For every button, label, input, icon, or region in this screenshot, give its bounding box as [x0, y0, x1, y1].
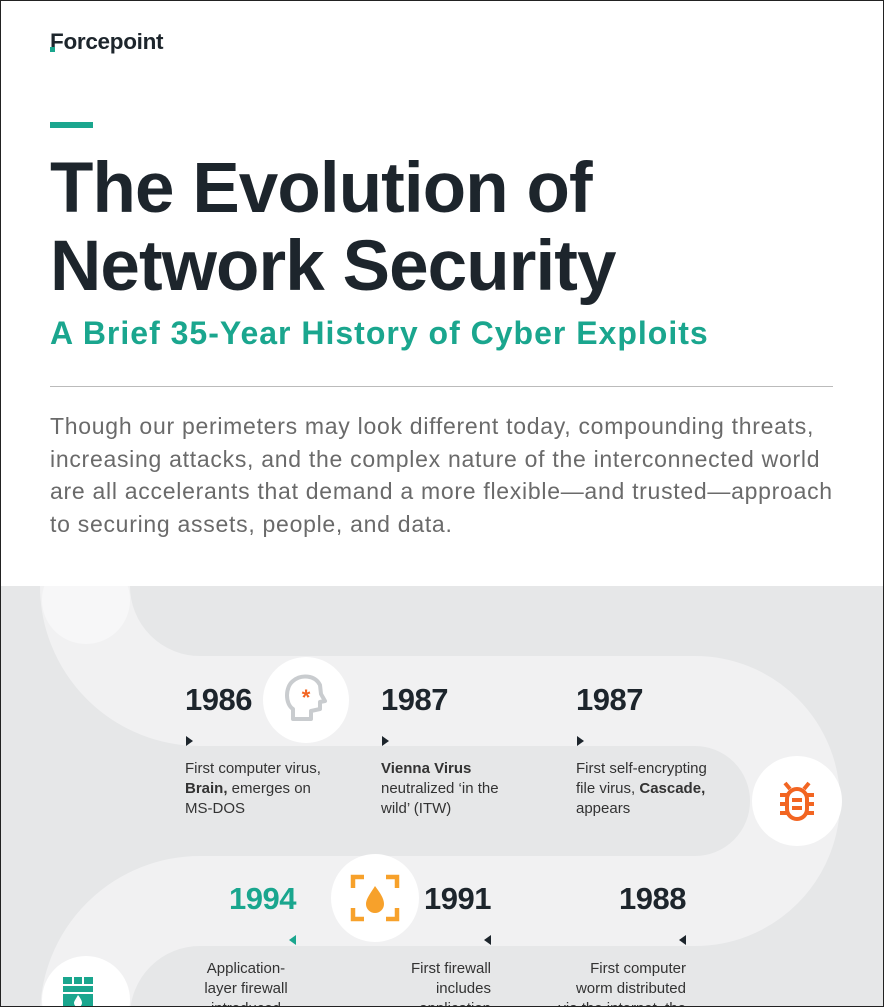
entry 1991: First firewall — [411, 960, 491, 977]
icon: brain head: * — [302, 685, 311, 710]
entry 1987 Vienna: Vienna Virus neutralized ‘in the wild’ (ITW) — [381, 760, 499, 817]
entry 1986 — [185, 682, 321, 817]
entry 1987 Cascade: file virus, Cascade, appears — [576, 780, 705, 817]
entry 1987 Cascade — [576, 682, 707, 817]
logo: Forcepoint — [50, 29, 163, 54]
intro paragraph — [50, 413, 833, 537]
entry 1991: includes — [436, 980, 491, 997]
entry 1987 Cascade: First self-encrypting — [576, 760, 707, 777]
intro paragraph: increasing attacks, and the complex nature of the interconnected world — [50, 446, 820, 472]
entry 1994: layer firewall — [204, 980, 288, 997]
entry 1986: 1986 — [185, 682, 252, 717]
entry 1988: worm distributed — [576, 980, 686, 997]
title: Network Security — [50, 227, 616, 306]
timeline panel — [0, 586, 884, 1007]
entry 1988 — [558, 882, 686, 1007]
subtitle: A Brief 35-Year History of Cyber Exploits — [50, 315, 709, 351]
entry 1988: 1988 — [619, 882, 686, 916]
entry 1991: 1991 — [424, 882, 491, 916]
intro paragraph: Though our perimeters may look different today, compounding threats, — [50, 413, 814, 439]
icon: brain head — [263, 657, 349, 743]
entry 1987 Cascade: 1987 — [576, 682, 643, 717]
entry 1994 — [204, 882, 296, 1007]
accent bar — [50, 122, 93, 128]
entry 1988: First computer — [590, 960, 686, 977]
entry 1994: Application- — [207, 960, 285, 977]
entry 1987 Vienna: 1987 — [381, 682, 448, 717]
intro paragraph: are all accelerants that demand a more flexible—and trusted—approach — [50, 478, 833, 504]
entry 1991 — [411, 882, 491, 1007]
icon: fire bracket — [331, 854, 419, 942]
divider — [50, 386, 833, 387]
entry 1986: First computer virus, Brain, emerges on MS-DOS — [185, 760, 321, 817]
intro paragraph: to securing assets, people, and data. — [50, 510, 453, 536]
icon: bug — [752, 756, 842, 846]
title: The Evolution of — [50, 149, 592, 228]
entry 1987 Vienna — [381, 682, 499, 817]
icon: firewall building — [42, 956, 130, 1006]
title — [50, 149, 616, 306]
entry 1994: 1994 — [229, 882, 296, 916]
